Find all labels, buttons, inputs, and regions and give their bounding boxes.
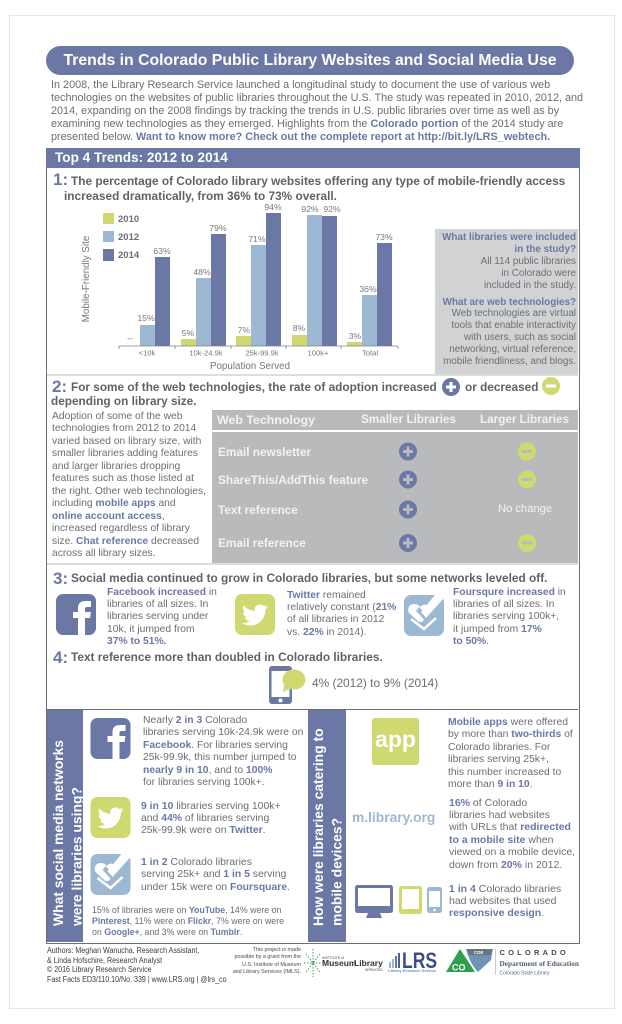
sidebar: what libraries were included: in Colorado were [501,268,576,279]
icon: foursquare large [90,854,130,895]
table: web technology adoption [212,410,578,563]
heading: top 4 trends [46,148,580,168]
sidebar: what libraries were included: networking, virtual reference, [449,344,576,355]
adoption paragraph: and larger libraries dropping [52,461,180,472]
footer: authors [47,946,227,984]
adoption paragraph: the right. Other web technologies, [52,486,206,497]
axis labels: 100k+ [308,348,329,358]
footer: authors: © 2016 Library Research Service [47,965,152,974]
sidebar: what libraries were included: included in the study. [484,280,576,291]
adoption paragraph: technologies from 2012 to 2014 [52,423,196,434]
mobile site text [449,796,575,871]
band text: mobile: How were libraries catering to [310,728,326,926]
table header: Web Technology [217,413,315,427]
responsive design text: had websites that used [449,895,556,907]
icon: twitter large [90,797,130,838]
band text: social: What social media networks [50,740,66,926]
twitter text: of all libraries in 2012 [287,614,384,625]
heading: top 4 trends: Top 4 Trends: 2012 to 2014 [55,150,228,165]
value labels: 7% [238,325,251,335]
band text: mobile: mobile devices? [328,818,344,926]
other networks text: 15% of libraries were on YouTube, 14% were on [92,905,281,915]
facebook detail text: libraries serving 10k-24.9k were on [143,727,303,738]
icon: foursquare [404,595,444,636]
mobile apps text: this number increased to [448,767,561,778]
icon: app [372,718,419,765]
intro text: presented below. Want to know more? Check out the complete report at http://bit.ly/LRS_webtech. [51,131,550,143]
mobile apps text: by more than two-thirds of [448,729,573,740]
trend 4 heading: Text reference more than doubled in Colorado libraries. [71,650,383,664]
mobile site text: 16% of Colorado [449,796,527,808]
table header: Larger Libraries [480,413,569,426]
foursquare detail text [141,857,290,893]
intro text: 2014, expanding on the 2008 findings by tracking the trends in U.S. public libraries over time as well as by [51,105,559,117]
mobile site text: to a mobile site when [449,834,553,846]
value labels: 8% [293,323,306,333]
facebook text: libraries serving under [107,611,208,622]
sidebar: what libraries were included: in the study? [515,244,576,255]
legend: 2010 [118,214,139,225]
value labels: -- [127,333,133,343]
axis titles: Population Served [210,361,290,372]
twitter text: Twitter remained [287,590,366,600]
band: social media question [47,710,83,942]
sidebar: what libraries were included: mobile friendliness, and blogs. [443,356,576,367]
footer: grant note: This project is made [253,947,301,953]
facebook detail text: Facebook. For libraries serving [143,740,288,751]
responsive design text: 1 in 4 Colorado libraries [449,882,561,894]
mobile apps text: Mobile apps were offered [448,717,568,728]
trend 4 heading: 4: [53,648,68,667]
footer: authors: Fast Facts ED3/110.10/No. 339 | www.LRS.org | @lrs_co [47,974,227,984]
value labels: 73% [375,232,393,242]
logo: Colorado Department of Education: Colorado State Library [500,970,550,976]
axis titles: Mobile-Friendly Site [81,235,92,322]
icon: app: app [375,726,416,752]
sidebar: what libraries were included: tools that enable interactivity [451,320,576,331]
main frame [46,148,580,944]
trend 4 heading [53,648,383,667]
facebook detail text: Nearly 2 in 3 Colorado [143,715,247,726]
trend 3 heading: 3: [53,568,68,588]
facebook text: 10k, it jumped from [107,624,195,635]
value labels: 48% [193,267,211,277]
mobile apps text: more than 9 in 10. [448,779,533,790]
facebook text: libraries of all sizes. In [107,599,208,610]
icon: phone with speech bubble [269,666,306,704]
trend 2 heading: or decreased [465,380,538,394]
facebook detail text: 25k-99.9k, this number jumped to [143,752,297,763]
logo: IMLS: SERVICES [365,968,383,972]
foursquare detail text: under 15k were on Foursquare. [141,882,290,893]
mobile site text: with URLs that redirected [449,821,571,833]
value labels: 5% [182,328,195,338]
intro text: In 2008, the Library Research Service launched a longitudinal study to document the use of various web [51,78,550,90]
intro text: examining new technologies as they emerged. Highlights from the Colorado portion of the 2014 study are [51,118,563,130]
footer: authors: & Linda Hofschire, Research Analyst [47,956,162,964]
logo: IMLS: Museum [322,958,357,968]
axis labels: <10k [139,348,156,358]
sidebar: what libraries were included [435,229,578,374]
icon: facebook [56,594,96,635]
twitter detail text: 25k-99.9k were on Twitter. [141,825,266,836]
footer: grant note: possible by a grant from the [234,954,301,960]
band: mobile question [308,710,346,942]
foursquare detail text: 1 in 2 Colorado libraries [141,857,252,868]
trend 2 heading [51,377,560,408]
logo: Colorado Department of Education: CDE [474,950,484,955]
mobile site text: viewed on a mobile device, [449,846,575,858]
adoption paragraph: increased regardless of library [52,523,190,534]
plus and minus icons [399,442,536,552]
axis labels: 25k-99.9k [245,348,279,358]
other networks text: Pinterest, 11% were on Flickr, 7% were on were [92,916,284,926]
trend 2 heading: For some of the web technologies, the rate of adoption increased [71,380,437,394]
legend [103,213,140,261]
row: text reference: Text reference [218,503,298,517]
foursquare text: libraries of all sizes. In [453,599,554,610]
value labels: 3% [349,331,362,341]
responsive design text [449,882,561,919]
facebook text [107,586,217,647]
icon: minus [542,377,560,395]
text reference stat: 4% (2012) to 9% (2014) [312,676,438,690]
value labels: 79% [209,223,227,233]
value labels: 71% [248,234,266,244]
legend: 2012 [118,232,139,243]
adoption paragraph: across all library sizes. [52,548,156,559]
value labels: 92% [323,204,341,214]
sidebar: what libraries were included: with users, such as social [464,332,576,343]
value labels: 92% [301,204,319,214]
logo: IMLS [304,949,383,977]
trend 1 heading: The percentage of Colorado library websites offering any type of mobile-friendly access [71,174,565,188]
adoption paragraph: online account access, [52,511,165,522]
icon: plus [442,378,460,396]
no change label: No change [498,503,552,515]
sidebar: what libraries were included: What libraries were included [442,232,576,243]
facebook detail text [143,715,303,788]
table header: Smaller Libraries [361,413,456,426]
logo: Colorado Department of Education [446,948,579,976]
bars [140,213,392,346]
footer: grant note: U.S. Institute of Museum [242,962,301,968]
foursquare detail text: serving 25k+ and 1 in 5 serving [141,869,286,880]
responsive design text: responsive design. [449,907,544,919]
facebook text: 37% to 51%. [107,636,167,647]
axis labels: 10k-24.9k [189,348,223,358]
logo: LRS [388,948,437,973]
adoption paragraph: smaller libraries adding features [52,448,198,459]
band text: social: were libraries using? [68,787,84,926]
band text: mobile [310,728,344,926]
row: sharethis: ShareThis/AddThis feature [218,473,368,487]
adoption paragraph: size. Chat reference decreased [52,536,199,547]
intro text: technologies on the websites of public libraries throughout the U.S. The study was repeated in 2010, 2012, and [51,92,583,104]
sidebar: what libraries were included: Web technologies are virtual [452,308,576,319]
twitter detail text: 9 in 10 libraries serving 100k+ [141,800,280,812]
logo: IMLS: INSTITUTE of [322,956,344,960]
intro text [51,78,583,143]
icon: responsive devices [355,885,442,918]
axis titles [81,235,290,372]
footer: authors: Authors: Meghan Wanucha, Research Assistant, [47,946,199,955]
trend 3 heading: Social media continued to grow in Colorado libraries, but some networks leveled off. [71,570,547,584]
value labels: 36% [359,284,377,294]
sidebar: what libraries were included: What are web technologies? [443,297,576,308]
adoption paragraph: varied based on library size, with [52,436,201,447]
adoption paragraph: features such as those listed at [52,473,194,484]
band text: social [50,740,84,926]
row: email reference: Email reference [218,536,306,550]
twitter text: vs. 22% in 2014). [287,627,367,638]
logo: LRS: Library Research Service [388,968,437,973]
icon: twitter [235,594,275,635]
foursquare text: Foursqure increased in [453,586,566,598]
footer: grant note [233,947,301,975]
facebook text: Facebook increased in [107,586,217,598]
logo: LRS: LRS [402,948,437,973]
legend: 2014 [118,250,140,261]
foursquare text: it jumped from 17% [453,624,542,635]
logo: Colorado Department of Education: CO [452,962,466,972]
mobile site text: down from 20% in 2012. [449,859,562,871]
adoption paragraph [52,411,206,559]
sidebar: what libraries were included: All 114 public libraries [481,256,576,267]
logo: Colorado Department of Education: COLORADO [500,948,569,957]
value labels: 94% [264,202,282,212]
mobile apps text [448,717,573,790]
trend 1 heading [53,170,565,202]
twitter detail text: and 44% of libraries serving [141,813,269,824]
bar chart: mobile-friendly site by population served [81,202,398,372]
trend 2 heading: depending on library size. [51,394,197,408]
facebook detail text: for libraries serving 100k+. [143,777,265,788]
value labels [127,202,393,343]
other networks text [92,905,284,937]
mobile apps text: libraries serving 25k+, [448,754,549,765]
foursquare text [453,586,566,647]
axis labels [139,348,378,358]
title: Trends in Colorado Public Library Websites and Social Media Use [63,52,557,69]
twitter text: relatively constant (21% [287,602,396,613]
axis labels: Total [362,348,378,358]
mobile apps text: Colorado libraries. For [448,742,550,753]
foursquare text: libraries serving 100k+, [453,611,559,622]
trend 1 heading: 1: [53,170,68,189]
adoption paragraph: Adoption of some of the web [52,411,183,422]
title [46,46,574,75]
adoption paragraph: including mobile apps and [52,498,176,509]
other networks text: on Google+, and 3% were on Tumblr. [92,927,242,937]
foursquare text: to 50%. [453,636,489,647]
footer: grant note: and Library Services (IMLS). [233,969,301,975]
table header [217,413,569,427]
logo: IMLS: Library [354,958,383,968]
twitter text [287,590,396,638]
twitter detail text [141,800,280,836]
trend 1 heading: increased dramatically, from 36% to 73% overall. [64,188,337,202]
m.library.org label: m.library.org [352,810,435,825]
logo: Colorado Department of Education: Department of Education [500,959,579,968]
mobile site text: libraries had websites [449,809,550,821]
row: email newsletter: Email newsletter [218,445,311,459]
trend 2 heading: 2: [52,377,67,396]
facebook detail text: nearly 9 in 10, and to 100% [143,765,272,776]
value labels: 15% [137,313,155,323]
icon: facebook large [90,718,130,759]
value labels: 63% [153,246,171,256]
